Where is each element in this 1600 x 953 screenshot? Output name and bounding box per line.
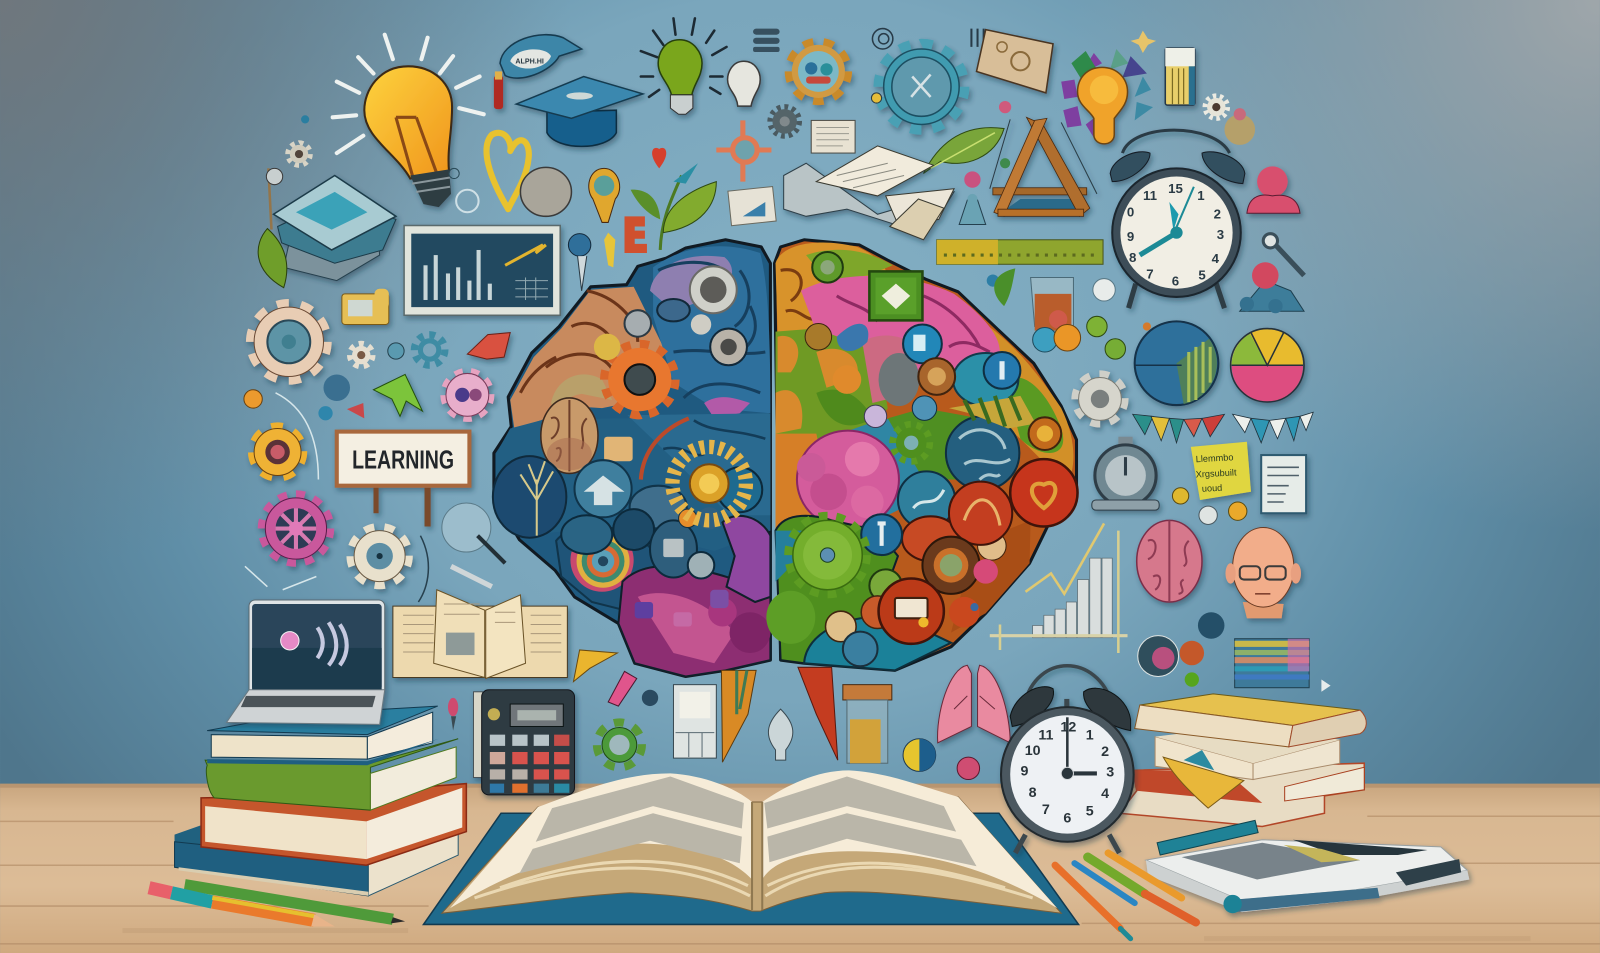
icon: pink tube (608, 671, 637, 706)
front alarm clock: 2 (1101, 744, 1109, 760)
right book stack (1119, 694, 1366, 826)
icon: stack symbol (753, 29, 780, 52)
icon: spiral and barcode doodles (872, 29, 984, 49)
icon: big alarm clock: 3 (1217, 227, 1224, 242)
icon: gear with faces (789, 42, 848, 101)
icon: big alarm clock (1110, 130, 1245, 308)
green book (205, 739, 458, 810)
icon: orange key with gems (1061, 49, 1153, 144)
doodles: curves near gears (245, 393, 428, 602)
brain (493, 240, 1078, 762)
left book stack (175, 706, 466, 896)
arrow: small red triangle (347, 403, 364, 418)
icon: chart board (404, 225, 560, 315)
sign: LEARNING (335, 430, 471, 526)
red book (201, 784, 466, 865)
front alarm clock: 10 (1025, 743, 1041, 759)
text blocks on pages (519, 776, 977, 873)
icon: graduation cap (516, 77, 643, 146)
icon: red letter E (625, 216, 647, 253)
icon: grey gear top (770, 107, 799, 136)
icon: pink gear (263, 496, 329, 561)
icon: molecule cluster (1240, 262, 1304, 313)
icon: green leaf (923, 128, 1004, 173)
icon: jar (843, 685, 892, 763)
front alarm clock: 1 (1086, 728, 1094, 744)
icon: paper note (811, 120, 855, 153)
icon: wooden triangle scale (990, 117, 1097, 216)
blue bottom book (175, 821, 458, 896)
icon: beige map card (977, 30, 1053, 93)
icon: pins and bulbs center-left (301, 115, 620, 291)
icon: green gear (790, 517, 865, 593)
chart: rainbow table (1235, 639, 1331, 692)
icon: big alarm clock: 7 (1146, 267, 1154, 282)
small balls (1172, 488, 1247, 524)
icon: teal gear left (414, 335, 445, 365)
bulb rays (333, 35, 484, 153)
icon: big alarm clock: 8 (1129, 250, 1136, 265)
left pencils (149, 885, 405, 926)
arrow: green (373, 374, 422, 416)
icon: pink gear small (445, 372, 490, 417)
icon: big alarm clock: 1 (1197, 188, 1205, 203)
icon: speech bubble with ALPH.HI: ALPH.HI (515, 57, 544, 65)
icon: teal gear (880, 45, 963, 129)
front alarm clock: 4 (1101, 786, 1109, 802)
icon: small gear top left (288, 143, 310, 165)
icon: flower plant (631, 148, 716, 250)
icon: beige gear lower (352, 529, 407, 584)
icon: pink person (1247, 166, 1300, 213)
left hemisphere (493, 240, 770, 676)
icon: big alarm clock: 15 (1168, 181, 1183, 196)
bookmark (1163, 750, 1244, 808)
top yellow book (1135, 694, 1366, 747)
icon: white calculator (1146, 840, 1469, 913)
icon: yellow striped card (1165, 48, 1195, 105)
teal marker (1157, 820, 1258, 855)
icon: beaker with balls (1031, 278, 1125, 359)
icon: small chart document (728, 187, 776, 226)
icon: balls by jar (903, 739, 980, 780)
icon: stacked cap (274, 175, 396, 281)
icon: flower gear cluster (1138, 612, 1224, 687)
icon: green light bulb (641, 18, 727, 114)
icon: pink brain (1137, 520, 1202, 602)
wooden table (0, 784, 1600, 953)
icon: pennant banners (1133, 412, 1313, 443)
icon: big alarm clock: 4 (1212, 251, 1220, 266)
icon: lungs (938, 665, 1010, 743)
icon: green sprout (994, 268, 1015, 306)
icon: leaf with pin (258, 168, 287, 288)
front alarm clock: 7 (1042, 802, 1050, 818)
middle cream book (1155, 724, 1340, 780)
chart: blue pie (1135, 321, 1218, 405)
icon: paper plane (573, 650, 617, 682)
icon: large yellow light bulb (333, 35, 484, 207)
sticky note: uoud (1202, 483, 1222, 494)
icon: open white book (784, 146, 954, 240)
icon: grey medallion (625, 266, 747, 365)
icon: beige gear (252, 305, 326, 379)
icon: dark calculator (473, 690, 575, 795)
sticky note: Llemmbo (1195, 452, 1234, 464)
icon: dark scribble and pin (448, 690, 658, 731)
right page (762, 770, 1057, 908)
icon: open book with pages (393, 590, 567, 679)
icon: seed bag (1224, 108, 1255, 145)
icon: small dark gear (1205, 96, 1228, 118)
icon: big alarm clock: 0 (1127, 204, 1134, 219)
icon: form document (673, 685, 716, 758)
icon: left side small gears (244, 107, 799, 767)
icon: yellow gear (253, 428, 302, 476)
page block edges (442, 797, 1061, 913)
icon: small green gear (893, 424, 930, 461)
icon: teal figure (959, 194, 986, 224)
front alarm clock: 12 (1060, 720, 1076, 736)
icon: yellow toy machine (342, 289, 389, 324)
front alarm clock: 9 (1021, 763, 1029, 779)
sticky note: Xrgsubuilt (1195, 467, 1237, 480)
big open book (423, 770, 1079, 924)
icon: small dots (871, 31, 1156, 331)
icon: magnifying glass (442, 503, 505, 587)
icon: big alarm clock: 2 (1214, 206, 1221, 221)
chart: rising bar chart (990, 523, 1128, 653)
icon: orange gear (606, 346, 673, 413)
right hemisphere (766, 240, 1078, 670)
icon: laptop (227, 600, 385, 724)
icon: stopwatch (1092, 437, 1159, 510)
left page (450, 773, 752, 908)
icon: big alarm clock: 9 (1127, 229, 1134, 244)
front pencils (1055, 853, 1196, 939)
front alarm clock: 5 (1086, 803, 1094, 819)
icon: big alarm clock: 5 (1198, 268, 1206, 283)
front alarm clock: 6 (1063, 810, 1071, 826)
icon: big alarm clock: 6 (1172, 274, 1179, 289)
sign: LEARNING: LEARNING (352, 446, 454, 474)
front alarm clock: 8 (1029, 785, 1037, 801)
icon: big alarm clock: 11 (1143, 188, 1157, 203)
icon: green gear small lower (597, 722, 642, 767)
icon: white bulb (728, 61, 760, 106)
icon: white small gear (350, 344, 372, 366)
icon: speech bubble with ALPH.HI (494, 35, 582, 109)
brain stems (721, 667, 838, 762)
icon: lamp bulb (768, 709, 793, 760)
document card (1261, 455, 1306, 513)
icon: yellow green ruler (937, 240, 1103, 264)
front alarm clock: 11 (1038, 728, 1054, 744)
bottom red book (1119, 763, 1364, 826)
icon: green square badge (869, 271, 922, 320)
sticky note (1191, 442, 1251, 500)
icon: grey gear (1077, 375, 1123, 422)
arrow: red (467, 333, 510, 359)
front alarm clock: 3 (1106, 764, 1114, 780)
icon: bald head with glasses (1225, 528, 1301, 618)
icon: orange cross (716, 120, 771, 182)
chart: colourful pie (1231, 329, 1304, 402)
front alarm clock (1001, 666, 1134, 853)
blue top book (207, 706, 439, 765)
icon: sun medallion (672, 447, 746, 520)
icon: safety pin (1263, 234, 1304, 275)
